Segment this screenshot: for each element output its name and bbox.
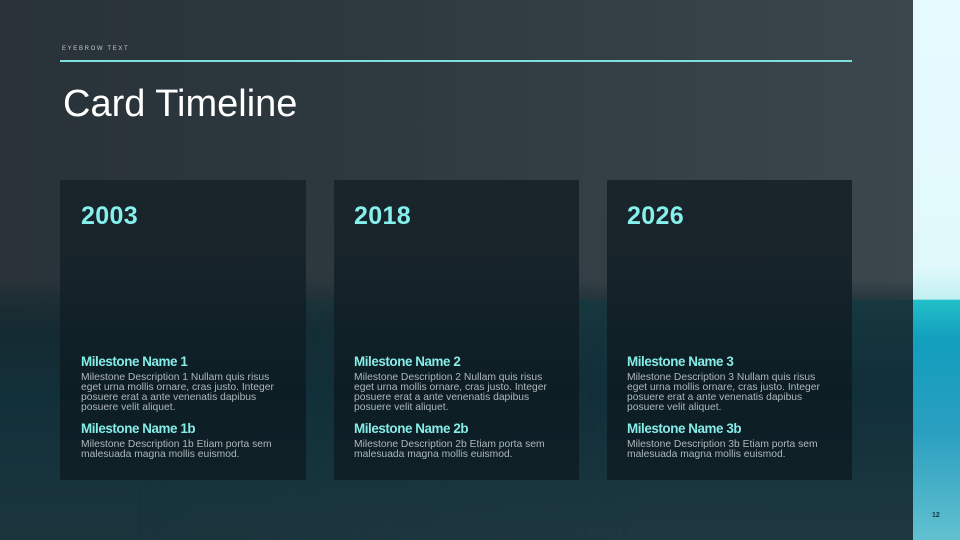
milestone 3b description [627, 439, 818, 460]
milestone 1b name: Milestone Name 1b [81, 421, 195, 436]
sharp horizon layer [579, 300, 913, 349]
milestone 3 name: Milestone Name 3 [627, 354, 733, 369]
milestone 2 description: Milestone Description 2 Nullam quis risus [354, 372, 542, 383]
milestone 3 description: Milestone Description 3 Nullam quis risus [627, 372, 815, 383]
card: 2018 [334, 180, 579, 480]
milestone 2b description: malesuada magna mollis euismod. [354, 449, 513, 460]
milestone 3 description: posuere velit aliquet. [627, 402, 721, 413]
milestone 2 description: posuere velit aliquet. [354, 402, 448, 413]
year: 2026 [627, 202, 684, 230]
milestone 1 description: eget urna mollis ornare, cras justo. Integer [81, 382, 274, 393]
header rule [60, 60, 852, 62]
card: 2003 [60, 180, 306, 480]
milestone 3b description: malesuada magna mollis euismod. [627, 449, 786, 460]
milestone 2b name: Milestone Name 2b [354, 421, 468, 436]
page number: 12 [932, 512, 940, 519]
eyebrow text: EYEBROW TEXT [62, 46, 129, 52]
milestone 1 description: posuere erat a ante venenatis dapibus [81, 392, 256, 403]
year: 2018 [354, 202, 411, 230]
milestone 3 description: posuere erat a ante venenatis dapibus [627, 392, 802, 403]
milestone 3 description [627, 372, 820, 413]
year: 2003 [81, 202, 138, 230]
milestone 3 description: eget urna mollis ornare, cras justo. Integer [627, 382, 820, 393]
milestone 1b description: malesuada magna mollis euismod. [81, 449, 240, 460]
soft water layer [0, 280, 913, 540]
milestone 3b name: Milestone Name 3b [627, 421, 741, 436]
milestone 2b description [354, 439, 545, 460]
card: 2026 [607, 180, 852, 480]
milestone 1 description: posuere velit aliquet. [81, 402, 175, 413]
milestone 2 description: posuere erat a ante venenatis dapibus [354, 392, 529, 403]
milestone 1 description: Milestone Description 1 Nullam quis risus [81, 372, 269, 383]
title: Card Timeline [63, 83, 297, 125]
milestone 2 description [354, 372, 547, 413]
milestone 1 name: Milestone Name 1 [81, 354, 187, 369]
right sidebar [913, 0, 960, 540]
milestone 1b description [81, 439, 272, 460]
milestone 3b description: Milestone Description 3b Etiam porta sem [627, 439, 818, 450]
milestone 1 description [81, 372, 274, 413]
milestone 2 name: Milestone Name 2 [354, 354, 460, 369]
milestone 2b description: Milestone Description 2b Etiam porta sem [354, 439, 545, 450]
milestone 1b description: Milestone Description 1b Etiam porta sem [81, 439, 272, 450]
milestone 2 description: eget urna mollis ornare, cras justo. Integer [354, 382, 547, 393]
